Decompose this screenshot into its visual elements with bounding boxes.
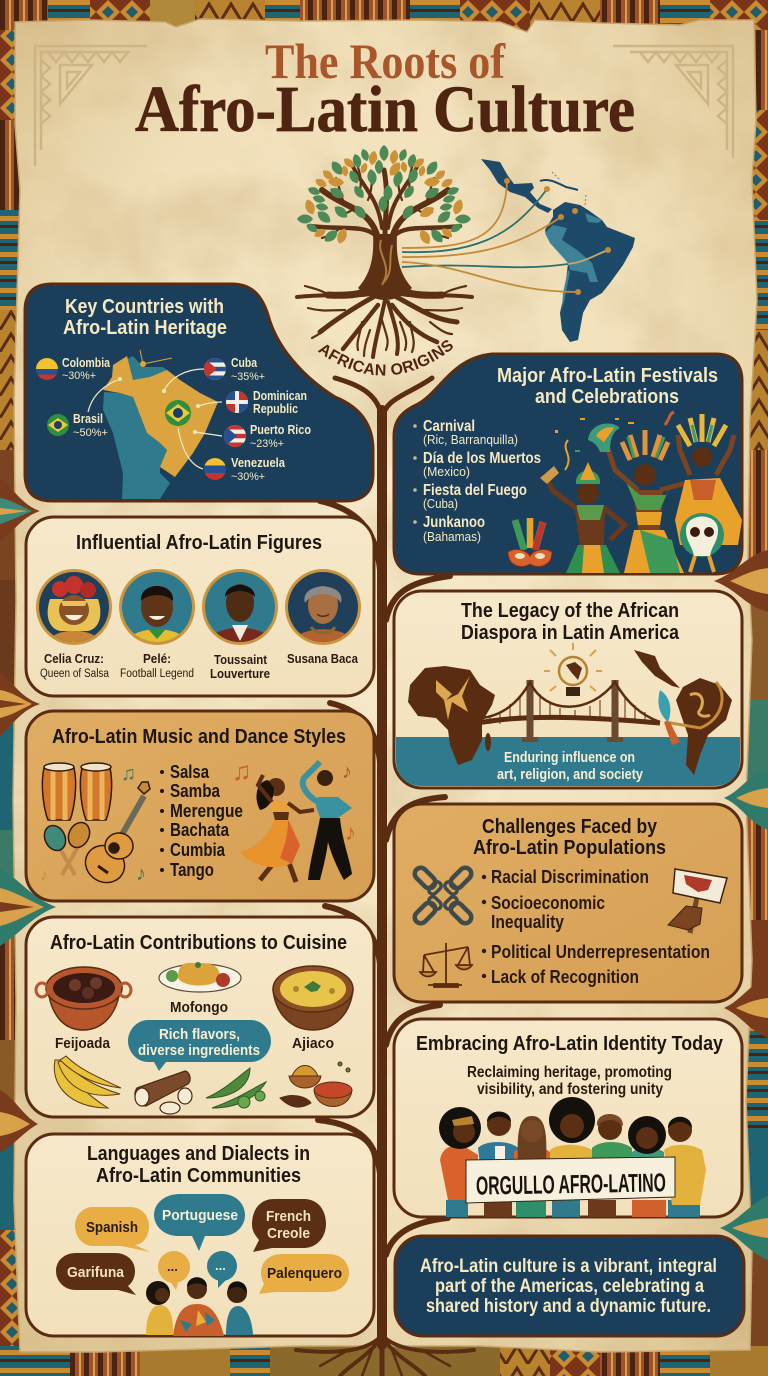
figure captions: Queen of Salsa	[40, 668, 110, 680]
bubble: Spanish: Spanish	[86, 1219, 138, 1236]
heading: Afro-Latin Music and Dance Styles	[52, 726, 346, 748]
heading: Afro-Latin Communities	[96, 1165, 301, 1187]
panel: music and dance	[26, 711, 374, 901]
country labels: ~30%+	[62, 370, 96, 382]
carnival mask	[508, 518, 552, 567]
bottom roots	[296, 1335, 474, 1376]
challenge list: Political Underrepresentation	[491, 942, 710, 962]
curved label: African Origins: AFRICAN ORIGINS	[318, 340, 453, 376]
flag: Dominican Republic	[226, 391, 248, 413]
country labels: Brasil	[73, 412, 103, 426]
figure captions	[40, 651, 359, 681]
icon: guitar	[79, 782, 150, 890]
dish labels	[55, 1035, 334, 1052]
bubble: French Creole: French	[266, 1208, 311, 1225]
panel: cuisine	[26, 917, 374, 1117]
dancer three	[675, 414, 742, 545]
heading	[473, 816, 666, 859]
heading: Diaspora in Latin America	[461, 622, 680, 644]
flag: Cuba	[204, 358, 226, 380]
icon: broken chains	[412, 865, 474, 926]
country labels: Cuba	[231, 356, 258, 370]
bubble: Palenquero	[259, 1254, 349, 1294]
icon: scales of justice	[420, 943, 472, 987]
bubble: Spanish	[75, 1207, 150, 1252]
portrait: Celia Cruz	[36, 569, 112, 645]
country labels: Puerto Rico	[250, 423, 311, 437]
dish labels: Ajiaco	[292, 1035, 334, 1052]
panel: closing statement: part of the Americas, celebrating a	[435, 1276, 704, 1297]
portrait: Toussaint Louverture	[202, 569, 278, 645]
flag: Colombia	[36, 358, 58, 380]
icon: mofongo plate	[159, 962, 241, 992]
icon: okra	[206, 1068, 266, 1108]
icon: music notes	[40, 756, 356, 885]
illustration: map of Latin America with migration lines	[402, 159, 635, 342]
panel: identity today	[394, 1019, 742, 1217]
heading: Embracing Afro-Latin Identity Today	[416, 1033, 724, 1055]
portrait: Pelé	[119, 569, 195, 645]
heading: Challenges Faced by	[482, 816, 658, 838]
label: Mofongo: Mofongo	[170, 999, 228, 1016]
style list: Bachata	[170, 820, 230, 840]
illustration: bridge	[478, 680, 660, 742]
panel: closing statement: shared history and a dynamic future.	[426, 1296, 711, 1317]
confetti	[555, 412, 674, 470]
dancer one	[540, 462, 625, 573]
festival list: (Cuba)	[423, 497, 458, 511]
festival list: Junkanoo	[423, 514, 485, 531]
figure captions: Toussaint	[214, 652, 268, 667]
title: Afro-Latin Culture	[135, 73, 635, 146]
bubble: French Creole	[252, 1199, 326, 1252]
title	[135, 33, 635, 146]
challenge list: Inequality	[491, 912, 564, 932]
corner ornament: top left	[35, 46, 147, 166]
bubble: French Creole: Creole	[267, 1225, 310, 1242]
style list: Cumbia	[170, 840, 226, 860]
title: The Roots of	[265, 33, 506, 89]
challenge list: Lack of Recognition	[491, 967, 639, 987]
heading	[497, 365, 718, 408]
heading: Influential Afro-Latin Figures	[76, 532, 322, 554]
icon: music notes: ♪	[136, 863, 146, 885]
icon: music notes: ♪	[40, 867, 48, 884]
icon: spices	[280, 1062, 352, 1107]
festival list: Día de los Muertos	[423, 450, 541, 467]
icon: feijoada pot	[36, 967, 131, 1030]
icon: music notes: ♪	[345, 820, 356, 845]
country labels: ~50%+	[73, 427, 108, 439]
illustration: carnival dancers	[508, 412, 742, 573]
country labels	[62, 356, 311, 483]
country labels: Venezuela	[231, 456, 286, 470]
small speech bubbles	[158, 1251, 237, 1290]
icon: lightbulb	[544, 643, 602, 696]
central trunk with branches	[318, 378, 450, 1345]
festival list: (Bahamas)	[423, 530, 481, 544]
figure captions: Celia Cruz:	[44, 651, 104, 666]
style list: Merengue	[170, 801, 243, 821]
illustration: three people talking	[146, 1277, 253, 1336]
panel: languages	[26, 1134, 374, 1336]
festival list: (Mexico)	[423, 465, 470, 479]
sugar skull	[680, 513, 724, 572]
illustration: Americas silhouette	[634, 650, 732, 775]
portrait: Susana Baca	[285, 569, 361, 645]
bubble: Portuguese	[154, 1194, 245, 1251]
illustration: Africa silhouette	[408, 666, 495, 765]
heading	[461, 600, 680, 644]
panel: influential figures	[26, 517, 374, 696]
caption	[497, 750, 643, 783]
panel: festivals	[394, 354, 742, 574]
flag: Puerto Rico	[224, 425, 246, 447]
small speech bubbles: ...	[167, 1259, 178, 1274]
icon: conga drums	[42, 763, 112, 820]
icon: bananas	[54, 1056, 121, 1108]
festival list: (Ric, Barranquilla)	[423, 433, 518, 447]
figure captions: Susana Baca	[287, 651, 359, 666]
heading: Afro-Latin Populations	[473, 837, 666, 859]
heading: Major Afro-Latin Festivals	[497, 365, 718, 387]
figure captions: Football Legend	[120, 668, 194, 680]
heading: The Legacy of the African	[461, 600, 679, 622]
icon: maracas	[40, 819, 94, 875]
panel: closing statement	[395, 1236, 744, 1336]
dancer two	[588, 424, 690, 573]
flag: Venezuela	[204, 458, 226, 480]
bubble: Garifuna: Garifuna	[67, 1264, 125, 1281]
subtitle	[467, 1064, 672, 1098]
bubble: Palenquero: Palenquero	[267, 1265, 342, 1282]
country labels: ~23%+	[250, 438, 284, 450]
challenge list: Racial Discrimination	[491, 867, 649, 887]
heading: Key Countries with	[65, 296, 224, 318]
icon: cassava	[135, 1071, 192, 1114]
callout: rich flavors: diverse ingredients	[138, 1042, 260, 1059]
subtitle: visibility, and fostering unity	[477, 1081, 663, 1098]
style list: Samba	[170, 781, 221, 801]
style list	[160, 762, 243, 880]
festival list: Carnival	[423, 418, 475, 435]
heading	[63, 296, 227, 339]
caption: Enduring influence on	[504, 750, 635, 766]
country labels: Republic	[253, 402, 298, 416]
map of South America	[88, 350, 222, 499]
illustration: dancing couple	[240, 762, 352, 882]
banner	[466, 1157, 675, 1203]
heading: Afro-Latin Contributions to Cuisine	[50, 932, 347, 954]
style list: Tango	[170, 860, 214, 880]
callout: rich flavors: Rich flavors,	[159, 1026, 240, 1043]
illustration: group of people	[439, 1097, 706, 1217]
dish labels: Feijoada	[55, 1035, 111, 1052]
panel: challenges	[394, 804, 742, 1002]
figure captions: Pelé:	[143, 651, 171, 666]
caption: art, religion, and society	[497, 767, 643, 783]
festival list	[413, 418, 541, 544]
flag: Brasil	[47, 414, 69, 436]
panel: diaspora legacy	[394, 591, 742, 788]
corner ornament: top right	[613, 46, 733, 158]
small speech bubbles: ...	[215, 1258, 226, 1273]
icon: music notes: ♪	[342, 761, 352, 783]
panel: closing statement: Afro-Latin culture is a vibrant, integral	[420, 1256, 717, 1277]
heading: Afro-Latin Heritage	[63, 317, 227, 339]
icon: music notes: ♫	[121, 763, 136, 785]
country labels: ~35%+	[231, 371, 265, 383]
heading: Languages and Dialects in	[87, 1143, 310, 1165]
illustration: tree with roots	[297, 145, 472, 357]
heading	[87, 1143, 310, 1187]
country labels: ~30%+	[231, 471, 265, 483]
heading: and Celebrations	[535, 386, 679, 408]
bubble: Portuguese: Portuguese	[162, 1207, 238, 1224]
challenge list	[482, 867, 710, 987]
icon: music notes: ♫	[232, 756, 252, 786]
leaf ornaments at panel junctions	[0, 478, 768, 1260]
bubble: Garifuna	[56, 1253, 136, 1295]
festival list: Fiesta del Fuego	[423, 482, 527, 499]
country labels: Colombia	[62, 356, 111, 370]
icon: ajiaco bowl	[273, 966, 353, 1030]
panel: key countries	[25, 284, 373, 501]
callout: rich flavors	[128, 1020, 271, 1071]
figure captions: Louverture	[210, 666, 270, 681]
icon: protest sign	[668, 869, 727, 933]
country labels: Dominican	[253, 389, 307, 403]
subtitle: Reclaiming heritage, promoting	[467, 1064, 672, 1081]
challenge list: Socioeconomic	[491, 893, 605, 913]
style list: Salsa	[170, 762, 210, 782]
